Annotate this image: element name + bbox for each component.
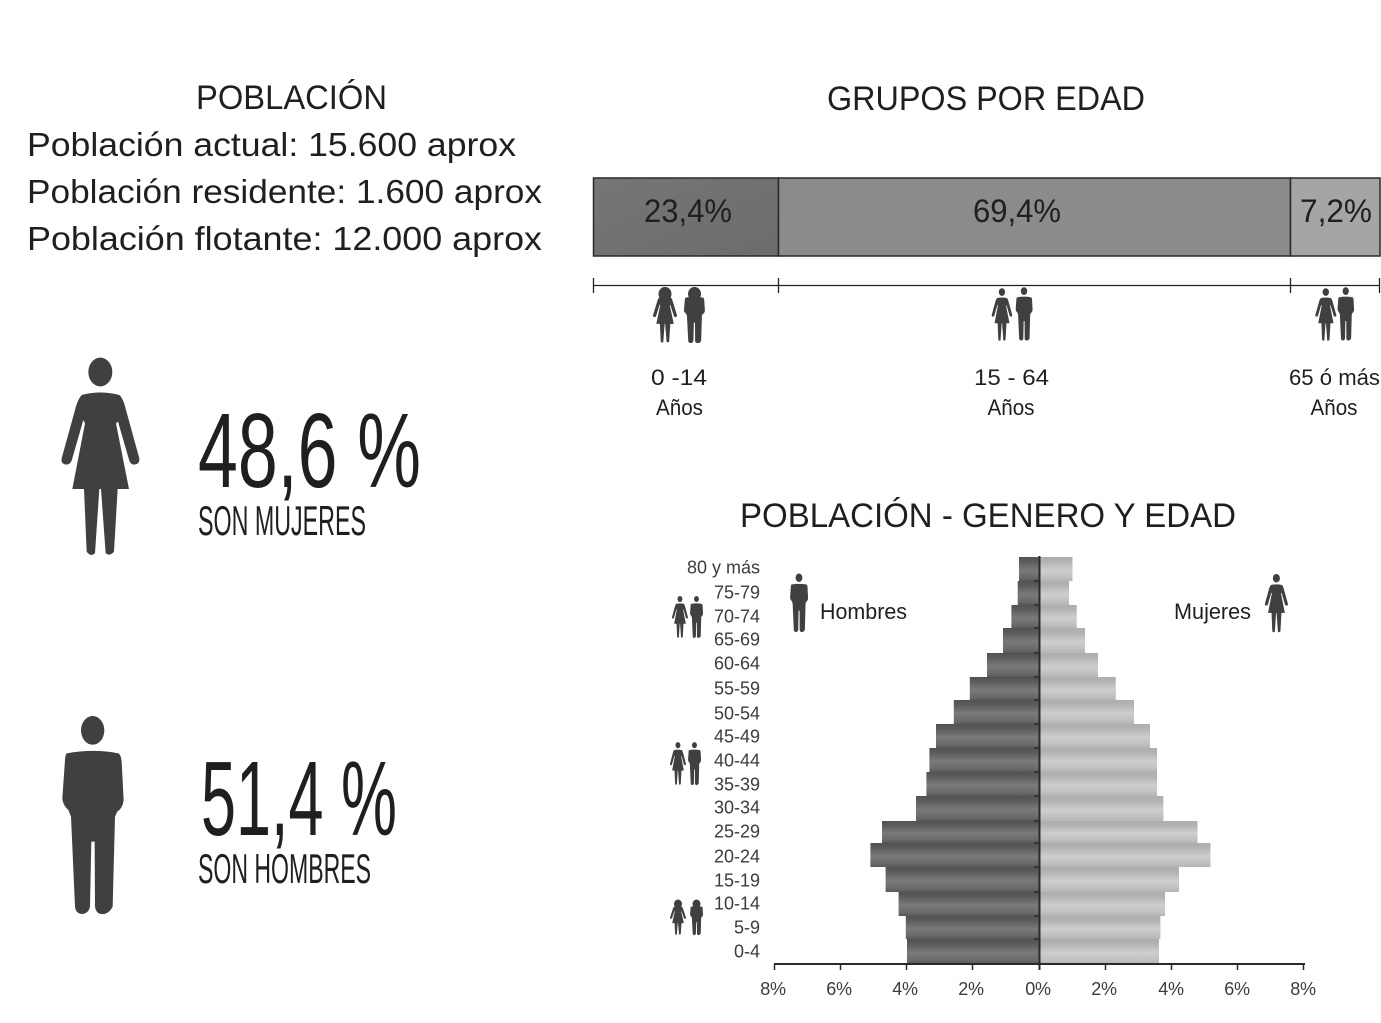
chart: percentage labels: 8% [1290, 979, 1316, 999]
icon: elderly group pair [672, 596, 703, 638]
stacked bar chart: 23,4% [644, 193, 732, 229]
text: población residente: Población residente: 1.600 aprox [27, 173, 543, 210]
icon: children pair [653, 287, 705, 343]
panel: women statistic [62, 358, 421, 555]
chart: age labels: 70-74 [714, 606, 760, 626]
chart: percentage labels: 8% [760, 979, 786, 999]
chart: age labels [687, 558, 760, 962]
legend: hombres [790, 574, 907, 632]
label: 15-64 años: 15 - 64 [974, 365, 1049, 390]
chart: percentage labels: 2% [958, 979, 984, 999]
legend: mujeres: Mujeres [1174, 599, 1251, 624]
panel: population pyramid [670, 497, 1316, 999]
chart: age labels: 40-44 [714, 750, 760, 770]
chart: age labels: 45-49 [714, 726, 760, 746]
chart: axes and ticks [774, 556, 1305, 970]
panel: population summary [27, 79, 543, 257]
legend: hombres: Hombres [820, 599, 907, 624]
chart: age labels: 35-39 [714, 774, 760, 794]
icon: seniors pair [1315, 287, 1354, 341]
chart: female bars [1040, 557, 1210, 964]
label: 0-14 años [651, 365, 707, 420]
heading: población: POBLACIÓN [196, 79, 387, 117]
figure: 51,4 %: 51,4 % [201, 740, 397, 858]
chart: percentage labels: 0% [1025, 979, 1051, 999]
label: son hombres: SON HOMBRES [198, 845, 371, 892]
icon: adult group pair [670, 742, 701, 785]
label: 65 ó más años: 65 ó más [1289, 365, 1380, 390]
chart: age labels: 15-19 [714, 870, 760, 890]
chart: age labels: 0-4 [734, 942, 760, 962]
stacked bar chart [594, 178, 1380, 256]
chart: age labels: 55-59 [714, 678, 760, 698]
chart: male bars [870, 557, 1040, 964]
chart: age labels: 65-69 [714, 630, 760, 650]
stacked bar chart: 7,2% [1300, 193, 1372, 229]
chart: percentage labels: 6% [1224, 979, 1250, 999]
panel: men statistic [62, 716, 397, 914]
chart: percentage labels: 4% [892, 979, 918, 999]
chart: age labels: 50-54 [714, 704, 760, 724]
chart: age labels: 25-29 [714, 822, 760, 842]
label: 0-14 años: 0 -14 [651, 365, 707, 390]
label: 65 ó más años [1289, 365, 1380, 420]
age range scale [593, 278, 1380, 293]
icon: woman [62, 358, 139, 555]
icon: man [62, 716, 124, 914]
text: población actual: Población actual: 15.600 aprox [27, 126, 517, 163]
chart: age labels: 20-24 [714, 846, 760, 866]
chart: percentage labels: 2% [1091, 979, 1117, 999]
chart: age labels: 30-34 [714, 798, 760, 818]
chart: age labels: 75-79 [714, 582, 760, 602]
stacked bar chart: 69,4% [973, 193, 1061, 229]
chart: percentage labels [760, 979, 1316, 999]
legend: mujeres [1174, 574, 1288, 632]
panel: age groups [593, 80, 1380, 420]
text: población flotante: Población flotante: 12.000 aprox [27, 220, 543, 257]
label: 15-64 años [974, 365, 1049, 420]
icon: adults pair [992, 287, 1033, 341]
figure: 48,6 %: 48,6 % [198, 392, 421, 510]
label: 15-64 años: Años [988, 395, 1034, 420]
label: son mujeres: SON MUJERES [198, 497, 366, 544]
label: 0-14 años: Años [656, 395, 703, 420]
chart: age labels: 60-64 [714, 654, 760, 674]
chart: percentage labels: 4% [1158, 979, 1184, 999]
heading: grupos por edad: GRUPOS POR EDAD [827, 80, 1145, 118]
chart: age labels: 80 y más [687, 558, 760, 578]
heading: población genero y edad: POBLACIÓN - GENERO Y EDAD [740, 497, 1236, 535]
chart: percentage labels: 6% [826, 979, 852, 999]
label: 65 ó más años: Años [1310, 395, 1358, 420]
chart: age labels: 5-9 [734, 918, 760, 938]
chart: age labels: 10-14 [714, 894, 760, 914]
icon: child group pair [670, 900, 703, 935]
